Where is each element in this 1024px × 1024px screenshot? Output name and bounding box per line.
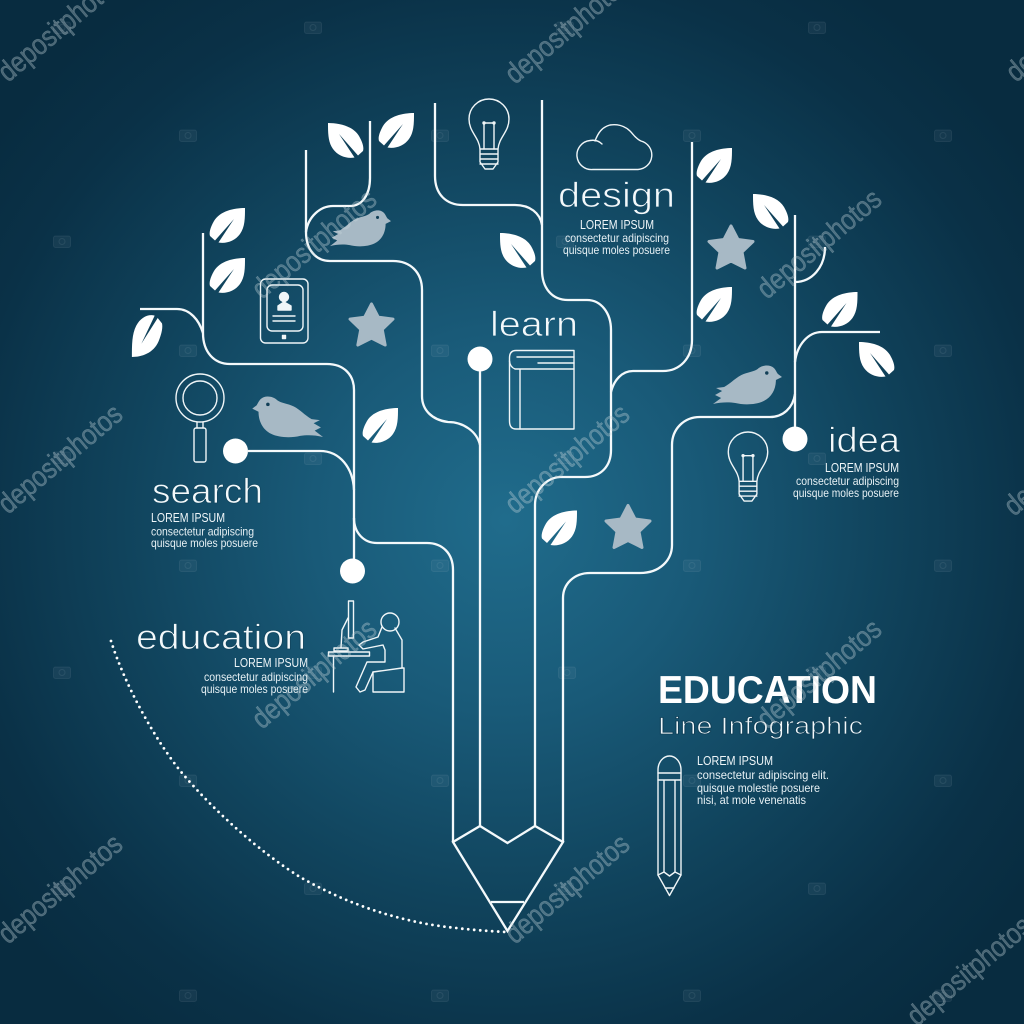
text block: search <box>151 472 263 550</box>
icon: light bulb right <box>728 432 768 501</box>
tree and pencil trunk lines <box>140 100 880 842</box>
icon: light bulb top <box>469 99 509 169</box>
text block: idea: idea <box>828 421 901 460</box>
text block: pencil note: consectetur adipiscing elit. <box>697 769 829 782</box>
depositphotos watermarks: depositphotos <box>246 613 383 735</box>
depositphotos watermarks: depositphotos <box>751 183 888 305</box>
text block: education: consectetur adipiscing <box>204 671 308 684</box>
depositphotos watermarks: depositphotos <box>499 398 636 520</box>
depositphotos watermarks: depositphotos <box>246 183 383 305</box>
icon: small pencil <box>658 756 681 896</box>
depositphotos watermarks: depositphotos <box>751 613 888 735</box>
stars <box>350 226 753 548</box>
dotted arc <box>111 641 507 932</box>
text block: design: LOREM IPSUM <box>580 218 654 232</box>
text block: search: LOREM IPSUM <box>151 511 225 525</box>
pencil tip <box>453 826 563 931</box>
text block: idea: quisque moles posuere <box>793 487 899 500</box>
title: EDUCATION <box>658 669 877 712</box>
text block: education <box>136 618 308 696</box>
text block: search: consectetur adipiscing <box>151 526 254 538</box>
text block: education: quisque moles posuere <box>201 683 308 696</box>
birds <box>252 210 782 437</box>
text block: design <box>558 176 675 257</box>
icon: tablet profile <box>260 279 308 343</box>
title <box>658 669 877 740</box>
leaves <box>132 113 894 545</box>
text block: design: consectetur adipiscing <box>565 232 669 245</box>
text block: pencil note: quisque molestie posuere <box>697 782 820 795</box>
text block: search: quisque moles posuere <box>151 537 258 550</box>
text block: learn: learn <box>490 305 578 344</box>
text block: design: quisque moles posuere <box>563 244 670 257</box>
icon: person at computer <box>328 601 404 692</box>
icon: cloud <box>577 125 652 170</box>
text block: idea <box>793 421 901 500</box>
text block: idea: consectetur adipiscing <box>796 475 899 488</box>
text block: idea: LOREM IPSUM <box>825 461 899 475</box>
text block: pencil note <box>697 754 829 807</box>
icon: book <box>510 350 574 429</box>
depositphotos watermarks: depositphotos <box>499 828 636 950</box>
title: Line Infographic <box>658 713 863 740</box>
text block: pencil note: nisi, at mole venenatis <box>697 794 806 807</box>
text block: pencil note: LOREM IPSUM <box>697 754 773 768</box>
text block: education: education <box>136 618 306 657</box>
text block: search: search <box>152 472 263 511</box>
icon: magnifier <box>176 374 224 462</box>
text block: design: design <box>558 176 675 215</box>
node circles <box>223 346 808 584</box>
text block: education: LOREM IPSUM <box>234 656 308 670</box>
